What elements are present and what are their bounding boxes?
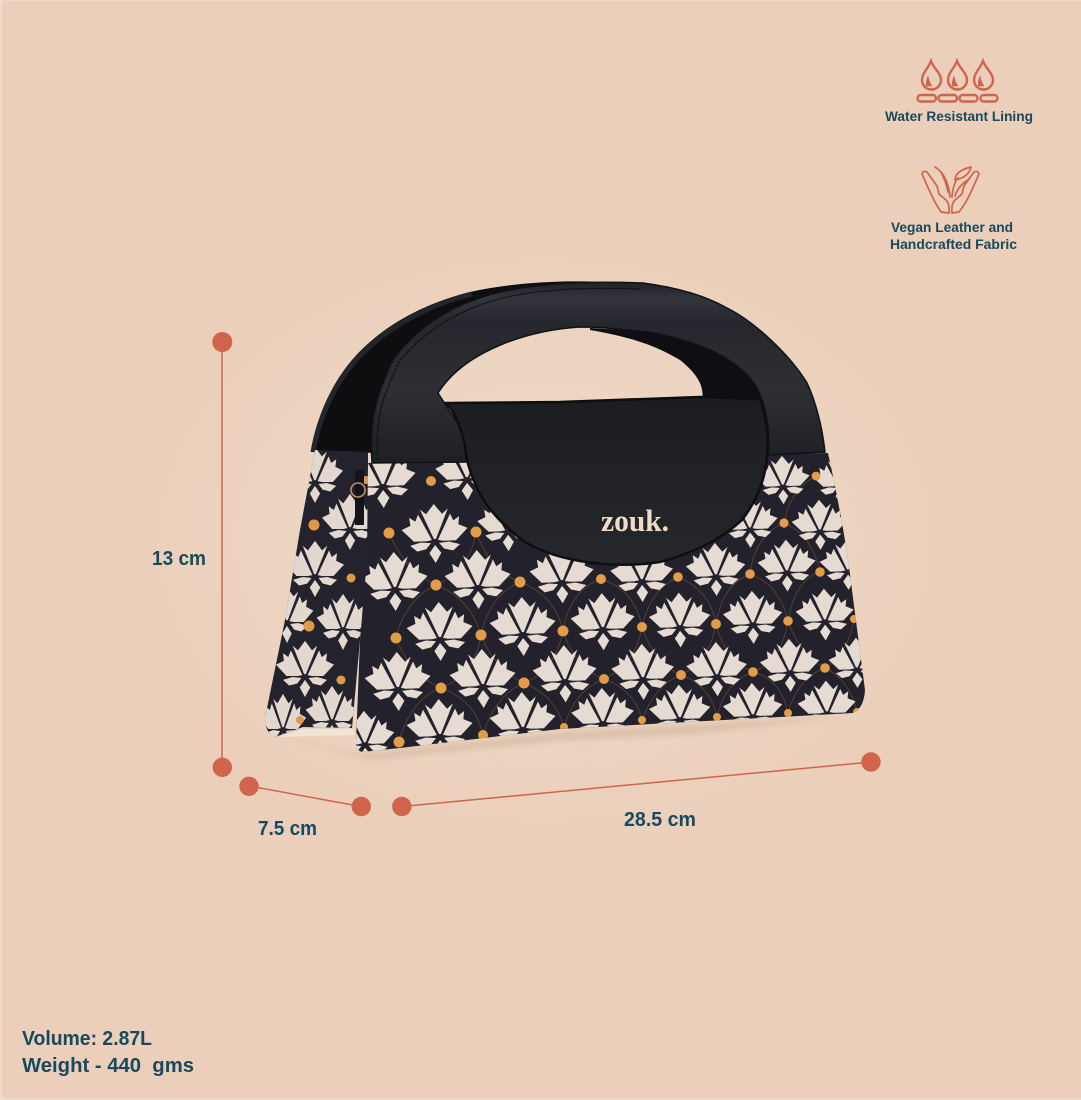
side fabric panel xyxy=(265,450,368,737)
icon: hands with leaf xyxy=(922,167,979,213)
label: handcrafted fabric: Handcrafted Fabric xyxy=(890,237,1018,252)
handbag xyxy=(260,281,886,765)
front handle xyxy=(371,282,825,463)
label: vegan leather: Vegan Leather and xyxy=(891,220,1013,235)
back handle rim xyxy=(313,294,472,452)
label: water resistant: Water Resistant Lining xyxy=(885,109,1033,124)
inner lining strip xyxy=(277,729,356,737)
depth dimension: 7.5 cm xyxy=(258,818,317,840)
height dimension xyxy=(152,332,232,777)
front flap xyxy=(446,397,768,565)
lattice stitching xyxy=(389,476,857,742)
depth dimension xyxy=(239,777,371,840)
background glow xyxy=(120,230,970,850)
width dimension xyxy=(392,752,881,831)
handle stitching xyxy=(377,288,640,460)
zouk logo: zouk. xyxy=(601,503,669,538)
height dimension: 13 cm xyxy=(152,548,206,570)
back handle xyxy=(311,281,600,453)
weight text: Weight - 440 gms xyxy=(22,1055,194,1077)
front fabric panel xyxy=(356,453,865,752)
volume text: Volume: 2.87L xyxy=(22,1028,152,1050)
width dimension: 28.5 cm xyxy=(624,809,696,831)
icon: water drops xyxy=(918,61,998,102)
bag shadow xyxy=(285,716,850,760)
inner handle shadow xyxy=(590,328,761,400)
